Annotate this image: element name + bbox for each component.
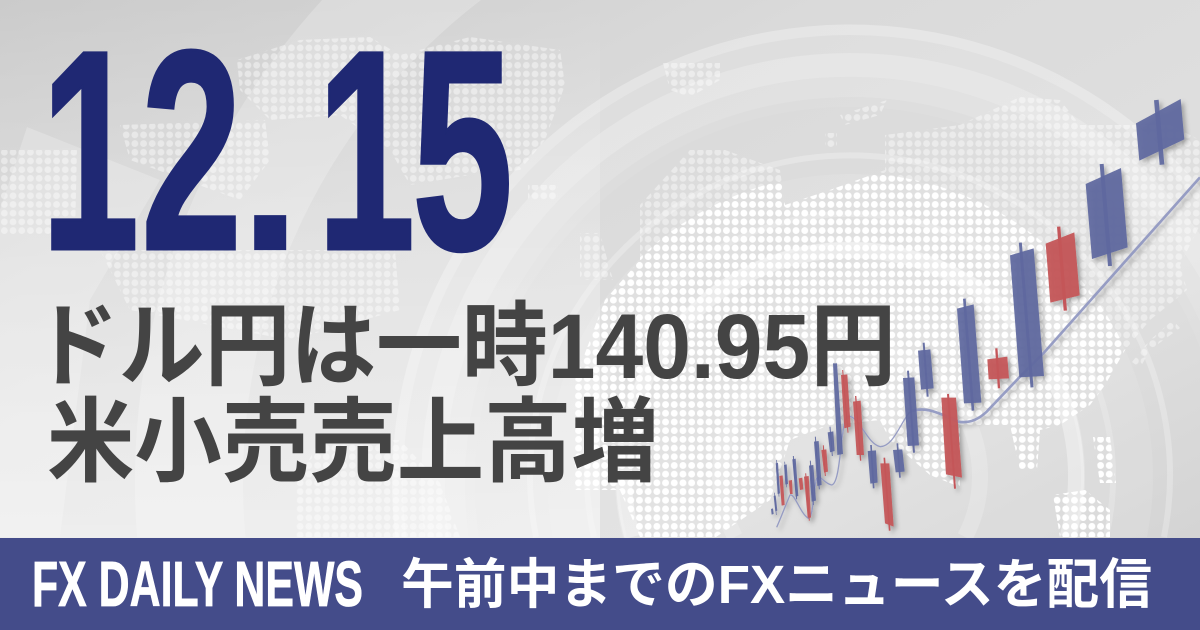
date heading: 2 [141, 0, 242, 310]
date heading: 1 [41, 0, 139, 310]
footer description text: 午前中までのFXニュースを配信 [401, 555, 1152, 615]
date heading [41, 0, 513, 310]
moving average line [777, 177, 1200, 527]
candlestick chart [771, 99, 1200, 531]
headline: 米小売売上高増 [47, 392, 659, 494]
red candles [779, 227, 1080, 531]
date heading: 1 [317, 0, 415, 310]
headline [33, 296, 896, 494]
headline: ドル円は一時140.95円 [33, 296, 896, 398]
date heading: 5 [412, 0, 513, 310]
footer band [0, 538, 1200, 630]
footer brand text: FX DAILY NEWS [32, 548, 363, 620]
date heading: . [241, 50, 300, 296]
blue candles [771, 99, 1184, 515]
dotted world map [0, 37, 1200, 537]
